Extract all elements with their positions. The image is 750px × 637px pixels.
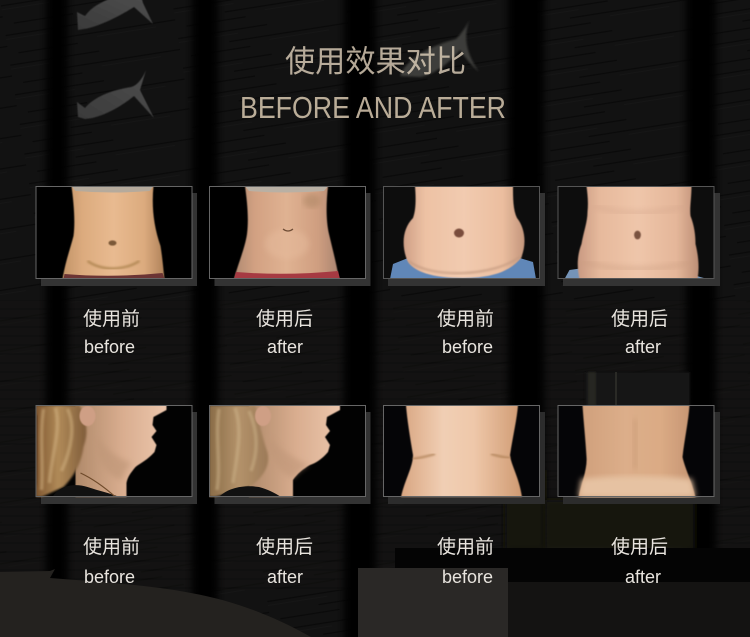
photo: abdomen after 1 [209, 186, 370, 286]
label row 2 column 4: after [625, 566, 661, 587]
title: English heading: BEFORE AND AFTER [240, 90, 506, 125]
label row 2 column 3 [437, 536, 494, 587]
label row 2 column 3: before [442, 566, 493, 587]
label row 2 column 4 [611, 536, 668, 587]
furniture: light box bottom centre [358, 568, 508, 637]
label row 1 column 1 [83, 308, 140, 357]
photo: abdomen after 2 [558, 186, 720, 286]
photo: back after [558, 405, 720, 504]
label row 1 column 4: after [625, 336, 661, 357]
label row 1 column 2: 使用后 [256, 308, 313, 330]
label row 2 column 2: 使用后 [256, 536, 313, 558]
label row 1 column 4: 使用后 [611, 308, 668, 330]
furniture: dark box bottom right [508, 582, 750, 637]
label row 1 column 2 [256, 308, 313, 357]
label row 1 column 3: before [442, 336, 493, 357]
title: Chinese heading: 使用效果对比 [285, 45, 466, 79]
label row 2 column 3: 使用前 [437, 536, 494, 558]
label row 2 column 2 [256, 536, 313, 587]
label row 1 column 4 [611, 308, 668, 357]
label row 2 column 1: 使用前 [83, 536, 140, 558]
photo: abdomen before 2 [383, 186, 545, 286]
label row 1 column 2: after [267, 336, 303, 357]
icon: decorative fish middle [77, 70, 154, 119]
furniture: bed bottom left [0, 569, 311, 637]
label row 1 column 1: before [84, 336, 135, 357]
background: lamp glow lower right [395, 372, 750, 584]
photo: back before [383, 405, 545, 504]
label row 2 column 4: 使用后 [611, 536, 668, 558]
photo: abdomen before 1 [36, 186, 197, 286]
icon: decorative fish behind title [400, 18, 479, 77]
label row 1 column 3: 使用前 [437, 308, 494, 330]
icon: decorative fish top [77, 0, 153, 30]
photo: neck after [209, 405, 370, 504]
label row 1 column 3 [437, 308, 494, 357]
label row 1 column 1: 使用前 [83, 308, 140, 330]
photo: neck before [36, 405, 197, 504]
label row 2 column 1 [83, 536, 140, 587]
label row 2 column 1: before [84, 566, 135, 587]
label row 2 column 2: after [267, 566, 303, 587]
